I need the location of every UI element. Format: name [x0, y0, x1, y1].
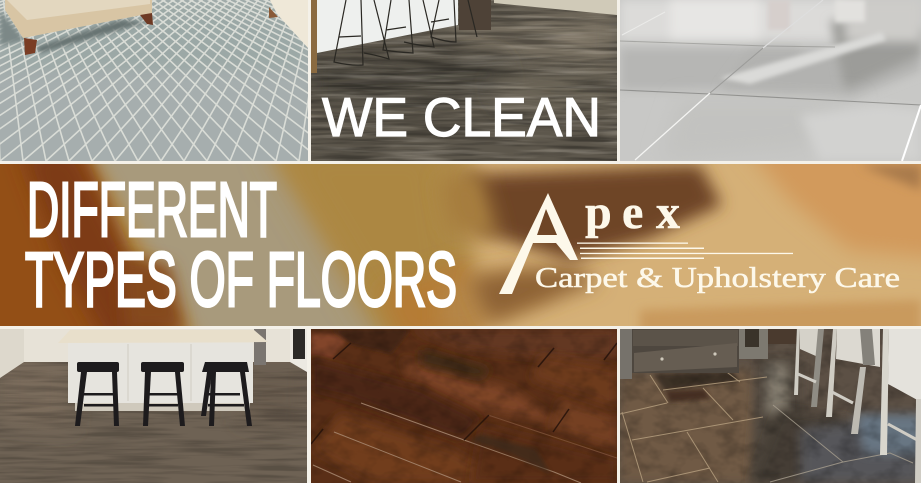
stone joints	[620, 367, 913, 482]
panel: patterned carpet photo	[0, 0, 308, 161]
bar stools	[334, 0, 477, 65]
panel: slate stone tile floor photo	[620, 329, 921, 483]
logo: Apex Carpet & Upholstery Care: Carpet & Upholstery Care	[535, 262, 900, 294]
logo: Apex Carpet & Upholstery Care: x	[656, 186, 680, 239]
carpet lattice lines, family A	[0, 0, 805, 161]
plank colouring	[311, 329, 617, 483]
logo: Apex Carpet & Upholstery Care: p	[585, 186, 612, 239]
white dining chairs	[794, 329, 921, 483]
back wall and cabinets	[0, 329, 307, 378]
distressed wood marks	[469, 434, 551, 474]
panel: grey ceramic tile floor photo	[620, 0, 921, 161]
tile shading	[620, 0, 921, 161]
white kitchen island	[58, 330, 268, 411]
white wall and trim	[311, 0, 617, 73]
sofa and cabinet	[0, 0, 308, 55]
heading: different types of floors: DIFFERENT	[27, 167, 277, 253]
carpet lattice lines, family B	[0, 0, 340, 161]
panel: kitchen island with laminate floor photo	[0, 329, 307, 483]
carpet base colour	[0, 0, 308, 161]
panel: central blurred wood band	[0, 164, 921, 326]
tile joints	[620, 0, 921, 161]
panel: grey wood plank floor photo	[311, 0, 617, 161]
panel: dark hardwood plank floor photo	[311, 329, 617, 483]
heading: different types of floors	[25, 167, 457, 323]
wood floor	[0, 329, 307, 483]
plank seams	[311, 343, 617, 483]
stone floor colouring	[620, 329, 921, 483]
blurred wood background	[0, 140, 921, 350]
heading: we clean: WE CLEAN	[322, 86, 601, 148]
heading: different types of floors: TYPES OF FLOORS	[25, 237, 457, 323]
cabinet with drawers	[620, 329, 796, 379]
logo: Apex Carpet & Upholstery Care	[499, 186, 900, 294]
logo: Apex Carpet & Upholstery Care: e	[622, 186, 643, 239]
floor shading	[311, 0, 617, 161]
three black stools	[75, 362, 252, 426]
